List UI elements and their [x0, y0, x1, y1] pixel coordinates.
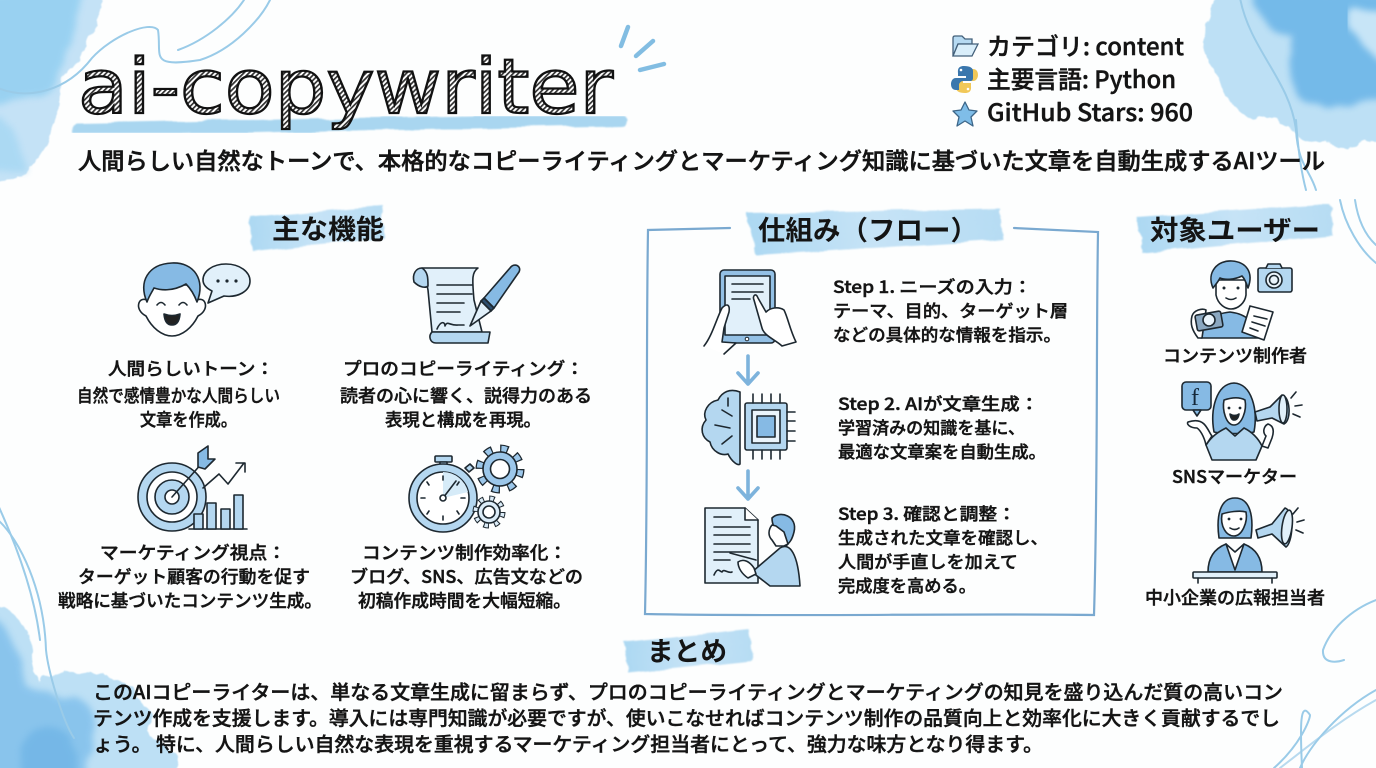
feature text: marketing: 戦略に基づいたコンテンツ生成。	[58, 588, 322, 613]
icon: python logo	[951, 66, 978, 93]
heading: summary	[624, 629, 753, 673]
step 2 text	[838, 390, 1046, 463]
panel: flow	[645, 209, 1098, 615]
watercolor wash: top-right	[1205, 0, 1376, 148]
subtitle: 人間らしい自然なトーンで、本格的なコピーライティングとマーケティング知識に基づいた文章を自動生成するAIツール	[78, 142, 1325, 176]
icon: target and growth chart	[138, 446, 247, 531]
title accent ticks	[621, 27, 664, 70]
step 3 text: Step 3. 確認と調整：	[838, 500, 1016, 525]
feature text: marketing: ターゲット顧客の行動を促す	[78, 564, 310, 589]
step 3 text	[838, 500, 1048, 597]
arrow: step 2 to 3	[738, 471, 758, 499]
step 2 text: 学習済みの知識を基に、	[838, 414, 1025, 439]
feature text: human tone	[77, 356, 280, 432]
feature text: efficiency: ブログ、SNS、広告文などの	[350, 564, 583, 589]
title underline brush	[80, 119, 620, 130]
feature text: pro copywriting: 読者の心に響く、説得力のある	[340, 383, 592, 408]
icon: scroll and pen	[413, 265, 520, 343]
feature text: marketing	[58, 540, 322, 613]
icon: smiling person with speech bubble	[139, 263, 250, 336]
feature text: human tone: 自然で感情豊かな人間らしい	[77, 383, 280, 408]
step 1 text: テーマ、目的、ターゲット層	[833, 297, 1068, 322]
title: ai-copywriter	[78, 42, 614, 131]
heading: features	[249, 206, 385, 252]
user label: PR staff: 中小企業の広報担当者	[1145, 585, 1325, 610]
user label: SNS marketer: SNSマーケター	[1172, 464, 1297, 489]
feature text: pro copywriting	[340, 356, 592, 432]
icon: content creator	[1191, 261, 1292, 340]
feature text: pro copywriting: プロのコピーライティング：	[343, 356, 584, 381]
panel: features	[58, 206, 592, 613]
icon: SNS marketer: f	[1191, 385, 1199, 411]
flow frame	[645, 228, 1098, 615]
feature text: human tone: 文章を作成。	[140, 407, 237, 432]
step 1 text	[833, 273, 1068, 346]
watercolor wash: top-left	[0, 0, 110, 182]
summary text: ょう。 特に、人間らしい自然な表現を重視するマーケティング担当者にとって、強力な味方となり得ます。	[93, 729, 1043, 757]
category text: カテゴリ: content	[987, 27, 1184, 62]
arrow: step 1 to 2	[738, 356, 758, 384]
watercolor wash: bottom-left	[0, 598, 178, 768]
step 1 text: Step 1. ニーズの入力：	[833, 273, 1032, 298]
icon: star	[953, 102, 977, 126]
feature text: human tone: 人間らしいトーン：	[108, 356, 274, 381]
feature text: efficiency	[350, 540, 583, 613]
heading: flow: 仕組み（フロー）	[758, 209, 978, 248]
summary text: テンツ作成を支援します。導入には専門知識が必要ですが、使いこなせればコンテンツ制作の品質向上と効率化に大きく貢献するでし	[93, 703, 1280, 731]
meta info	[951, 27, 1193, 128]
feature text: efficiency: コンテンツ制作効率化：	[362, 540, 567, 565]
step 2 text: 最適な文章案を自動生成。	[838, 438, 1046, 463]
step 2 text: Step 2. AIが文章生成：	[838, 390, 1039, 415]
language text: 主要言語: Python	[987, 60, 1176, 95]
feature text: pro copywriting: 表現と構成を再現。	[385, 407, 541, 432]
stars text: GitHub Stars: 960	[987, 93, 1193, 128]
summary text: このAIコピーライターは、単なる文章生成に留まらず、プロのコピーライティングとマーケティングの知見を盛り込んだ質の高いコン	[93, 677, 1283, 705]
icon: stopwatch and gears	[409, 448, 520, 532]
panel: target users	[1136, 204, 1334, 610]
icon: document review person	[705, 508, 800, 586]
icon: folder	[953, 36, 978, 56]
icon: PR person with podium	[1193, 498, 1304, 583]
user label: content creator: コンテンツ制作者	[1163, 343, 1307, 368]
step 3 text: 人間が手直しを加えて	[838, 548, 1018, 573]
heading: users	[1136, 204, 1334, 253]
summary text	[93, 677, 1283, 757]
heading: summary: まとめ	[647, 630, 727, 669]
step 3 text: 生成された文章を確認し、	[838, 524, 1048, 549]
step 3 text: 完成度を高める。	[838, 572, 976, 597]
step 1 text: などの具体的な情報を指示。	[833, 321, 1061, 346]
icon: tablet with hands	[704, 270, 796, 354]
icon: SNS marketer	[1182, 382, 1302, 460]
panel: summary	[93, 629, 1283, 757]
icon: brain and chip	[702, 390, 795, 465]
feature text: efficiency: 初稿作成時間を大幅短縮。	[358, 588, 571, 613]
heading: users: 対象ユーザー	[1150, 209, 1320, 248]
heading: features: 主な機能	[272, 208, 384, 247]
feature text: marketing: マーケティング視点：	[100, 540, 286, 565]
